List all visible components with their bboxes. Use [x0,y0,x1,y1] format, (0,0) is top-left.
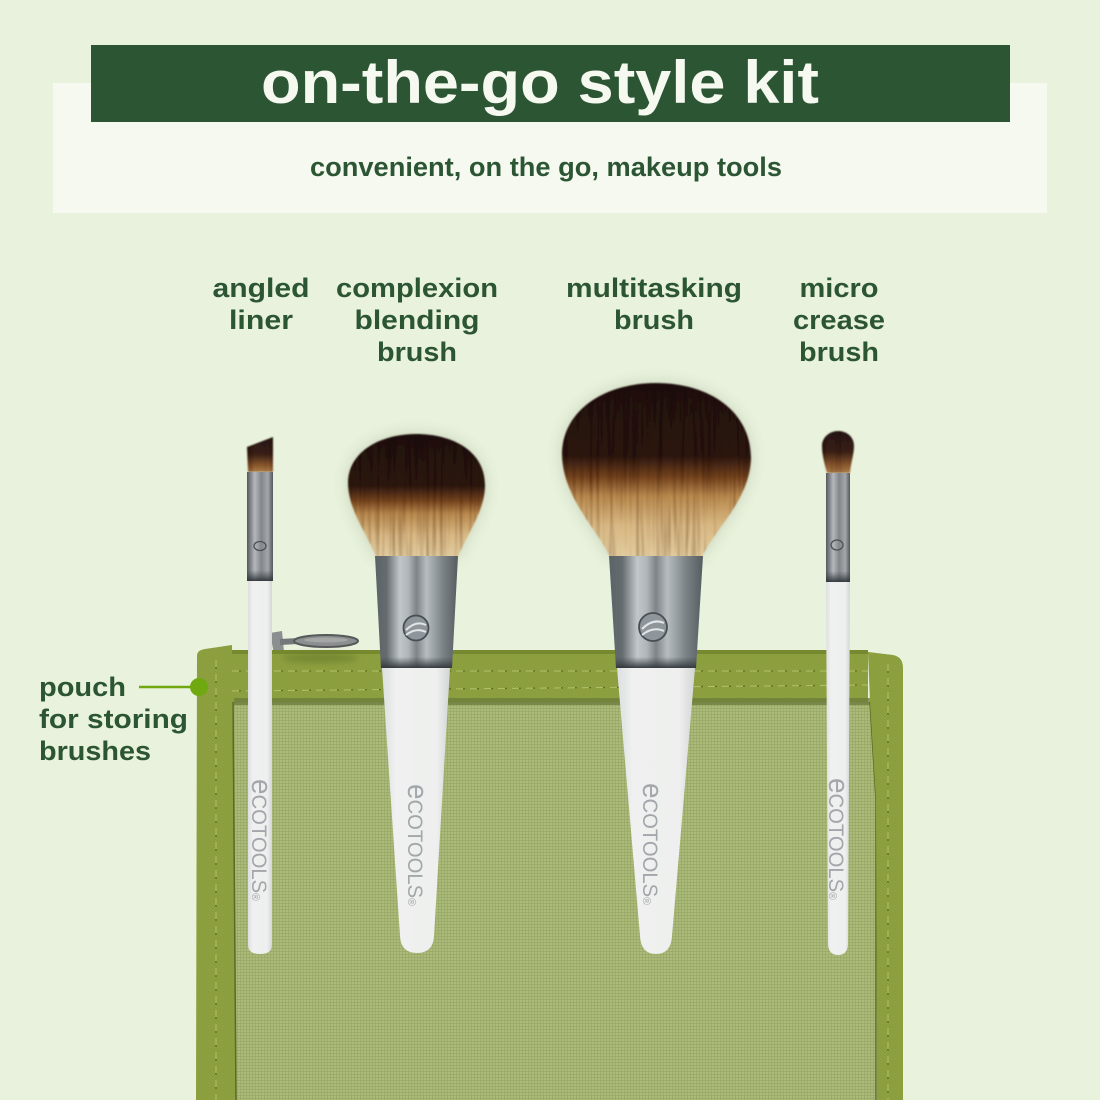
label: micro crease brush: brush [799,337,879,367]
label: complexion blending brush: blending [354,305,480,335]
label: complexion blending brush [336,273,498,367]
dark stitching [216,660,888,1100]
title: on-the-go style kit [261,49,819,116]
brush: angled liner [245,437,277,954]
label: micro crease brush [793,273,885,367]
label: angled liner: liner [229,305,294,335]
pouch top shading [232,650,868,654]
label: complexion blending brush: complexion [336,273,498,303]
brush: complexion blending [348,434,485,953]
brush: multitasking: e COTOOLS® [636,783,668,905]
brush: micro crease [822,431,854,955]
label: micro crease brush: micro [800,273,878,303]
label: complexion blending brush: brush [377,337,457,367]
label: angled liner: angled [212,273,310,303]
brush: multitasking [562,383,751,954]
label: micro crease brush: crease [793,305,885,335]
subtitle: convenient, on the go, makeup tools [310,152,782,182]
subtitle panel [53,83,1047,213]
light stitching [216,660,888,1100]
brush: angled liner: e COTOOLS® [245,779,277,901]
brush: micro crease: e COTOOLS® [822,778,854,900]
label: angled liner [212,273,310,335]
label: multitasking brush: multitasking [566,273,742,303]
mesh panel [234,702,876,1100]
pouch [196,631,903,1100]
brush: complexion blending: e COTOOLS® [401,784,433,906]
callout: pouch: brushes [39,736,151,766]
zipper pull [270,631,358,654]
label: multitasking brush [566,273,742,335]
label: multitasking brush: brush [614,305,694,335]
callout: pouch [39,672,208,766]
callout: pouch: pouch [39,672,126,702]
title banner [91,45,1010,122]
right binding [868,652,903,1100]
left binding [196,645,234,1100]
callout: pouch: for storing [39,704,188,734]
